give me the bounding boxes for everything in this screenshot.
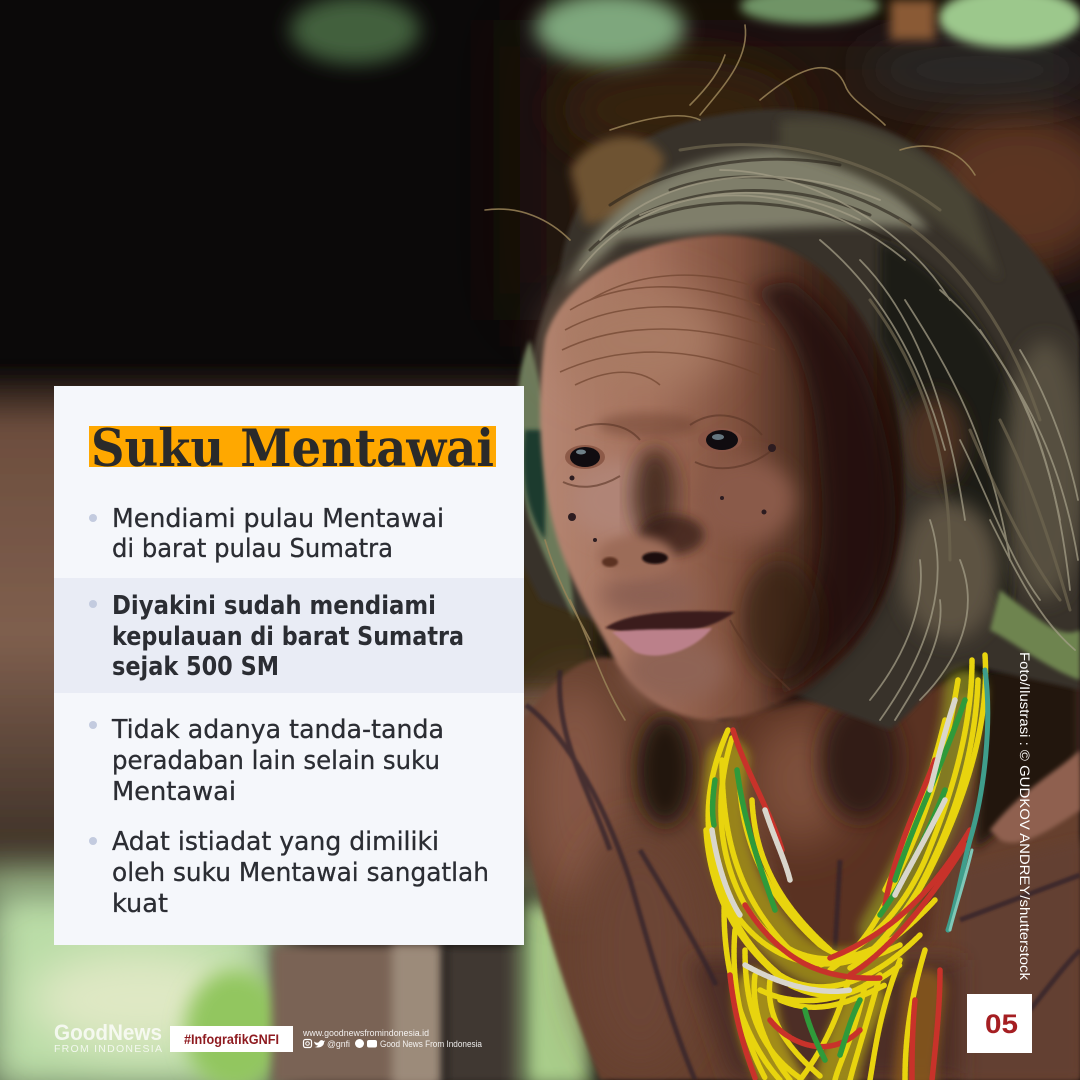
nose	[598, 536, 674, 576]
arm tattoos	[526, 670, 1080, 1080]
title: Suku Mentawai: Suku Mentawai	[91, 419, 494, 479]
photo credit: Foto/Ilustrasi : © GUDKOV ANDREY/shutterstock	[1017, 652, 1032, 980]
face shadows	[750, 280, 895, 705]
bullet 2 (emphasised): Diyakini sudah mendiami	[112, 591, 436, 621]
highlighted row background	[54, 578, 524, 693]
hair strands	[485, 25, 1078, 720]
forehead highlight	[555, 285, 725, 395]
footer website and social handles: www.goodnewsfromindonesia.id	[302, 1028, 429, 1038]
bullet 2 (emphasised): kepulauan di barat Sumatra	[112, 622, 464, 652]
page number: 05	[985, 1009, 1018, 1039]
forehead wrinkles	[560, 275, 775, 385]
page number	[967, 994, 1032, 1053]
bullet 3: peradaban lain selain suku	[112, 746, 440, 776]
hashtag tag	[170, 1026, 293, 1052]
bullet 4	[89, 827, 489, 919]
bullet 3: Mentawai	[112, 777, 236, 807]
bullet 3	[89, 715, 444, 807]
subject hair	[485, 25, 1080, 730]
photo subject: elderly Mentawai woman	[485, 25, 1080, 1080]
moles	[568, 444, 776, 542]
footer logo: GoodNews From Indonesia: GoodNews	[54, 1020, 162, 1045]
bullet 4: Adat istiadat yang dimiliki	[112, 827, 439, 857]
eyes	[565, 428, 742, 469]
bullet 2 (emphasised): sejak 500 SM	[112, 652, 279, 682]
bullet 1: di barat pulau Sumatra	[112, 534, 393, 564]
footer website and social handles	[302, 1028, 482, 1049]
bullet 1	[89, 504, 444, 564]
subject face	[540, 235, 904, 720]
bullet 3: Tidak adanya tanda-tanda	[111, 715, 444, 745]
footer website and social handles: Good News From Indonesia	[380, 1039, 482, 1049]
lower left greens and posts	[0, 880, 280, 1080]
hashtag tag: #InfografikGNFI	[184, 1032, 279, 1047]
footer website and social handles: @gnfi	[327, 1039, 350, 1049]
necklace underlay bands	[724, 690, 965, 1080]
bullet 4: oleh suku Mentawai sangatlah	[112, 858, 489, 888]
social icons: facebook and youtube	[355, 1039, 377, 1048]
subject body and shoulders	[524, 658, 1080, 1080]
bullet 4: kuat	[112, 889, 168, 919]
cheek and jaw creases	[563, 415, 790, 690]
beaded necklaces	[706, 655, 988, 1080]
social icons: instagram and twitter	[304, 1040, 325, 1048]
footer logo: GoodNews From Indonesia	[54, 1020, 162, 1055]
panel: info card	[54, 386, 524, 945]
lips	[605, 611, 735, 656]
footer logo: GoodNews From Indonesia: FROM INDONESIA	[54, 1043, 162, 1055]
bullet 1: Mendiami pulau Mentawai	[112, 504, 444, 534]
bullet 2 (emphasised)	[89, 591, 464, 682]
